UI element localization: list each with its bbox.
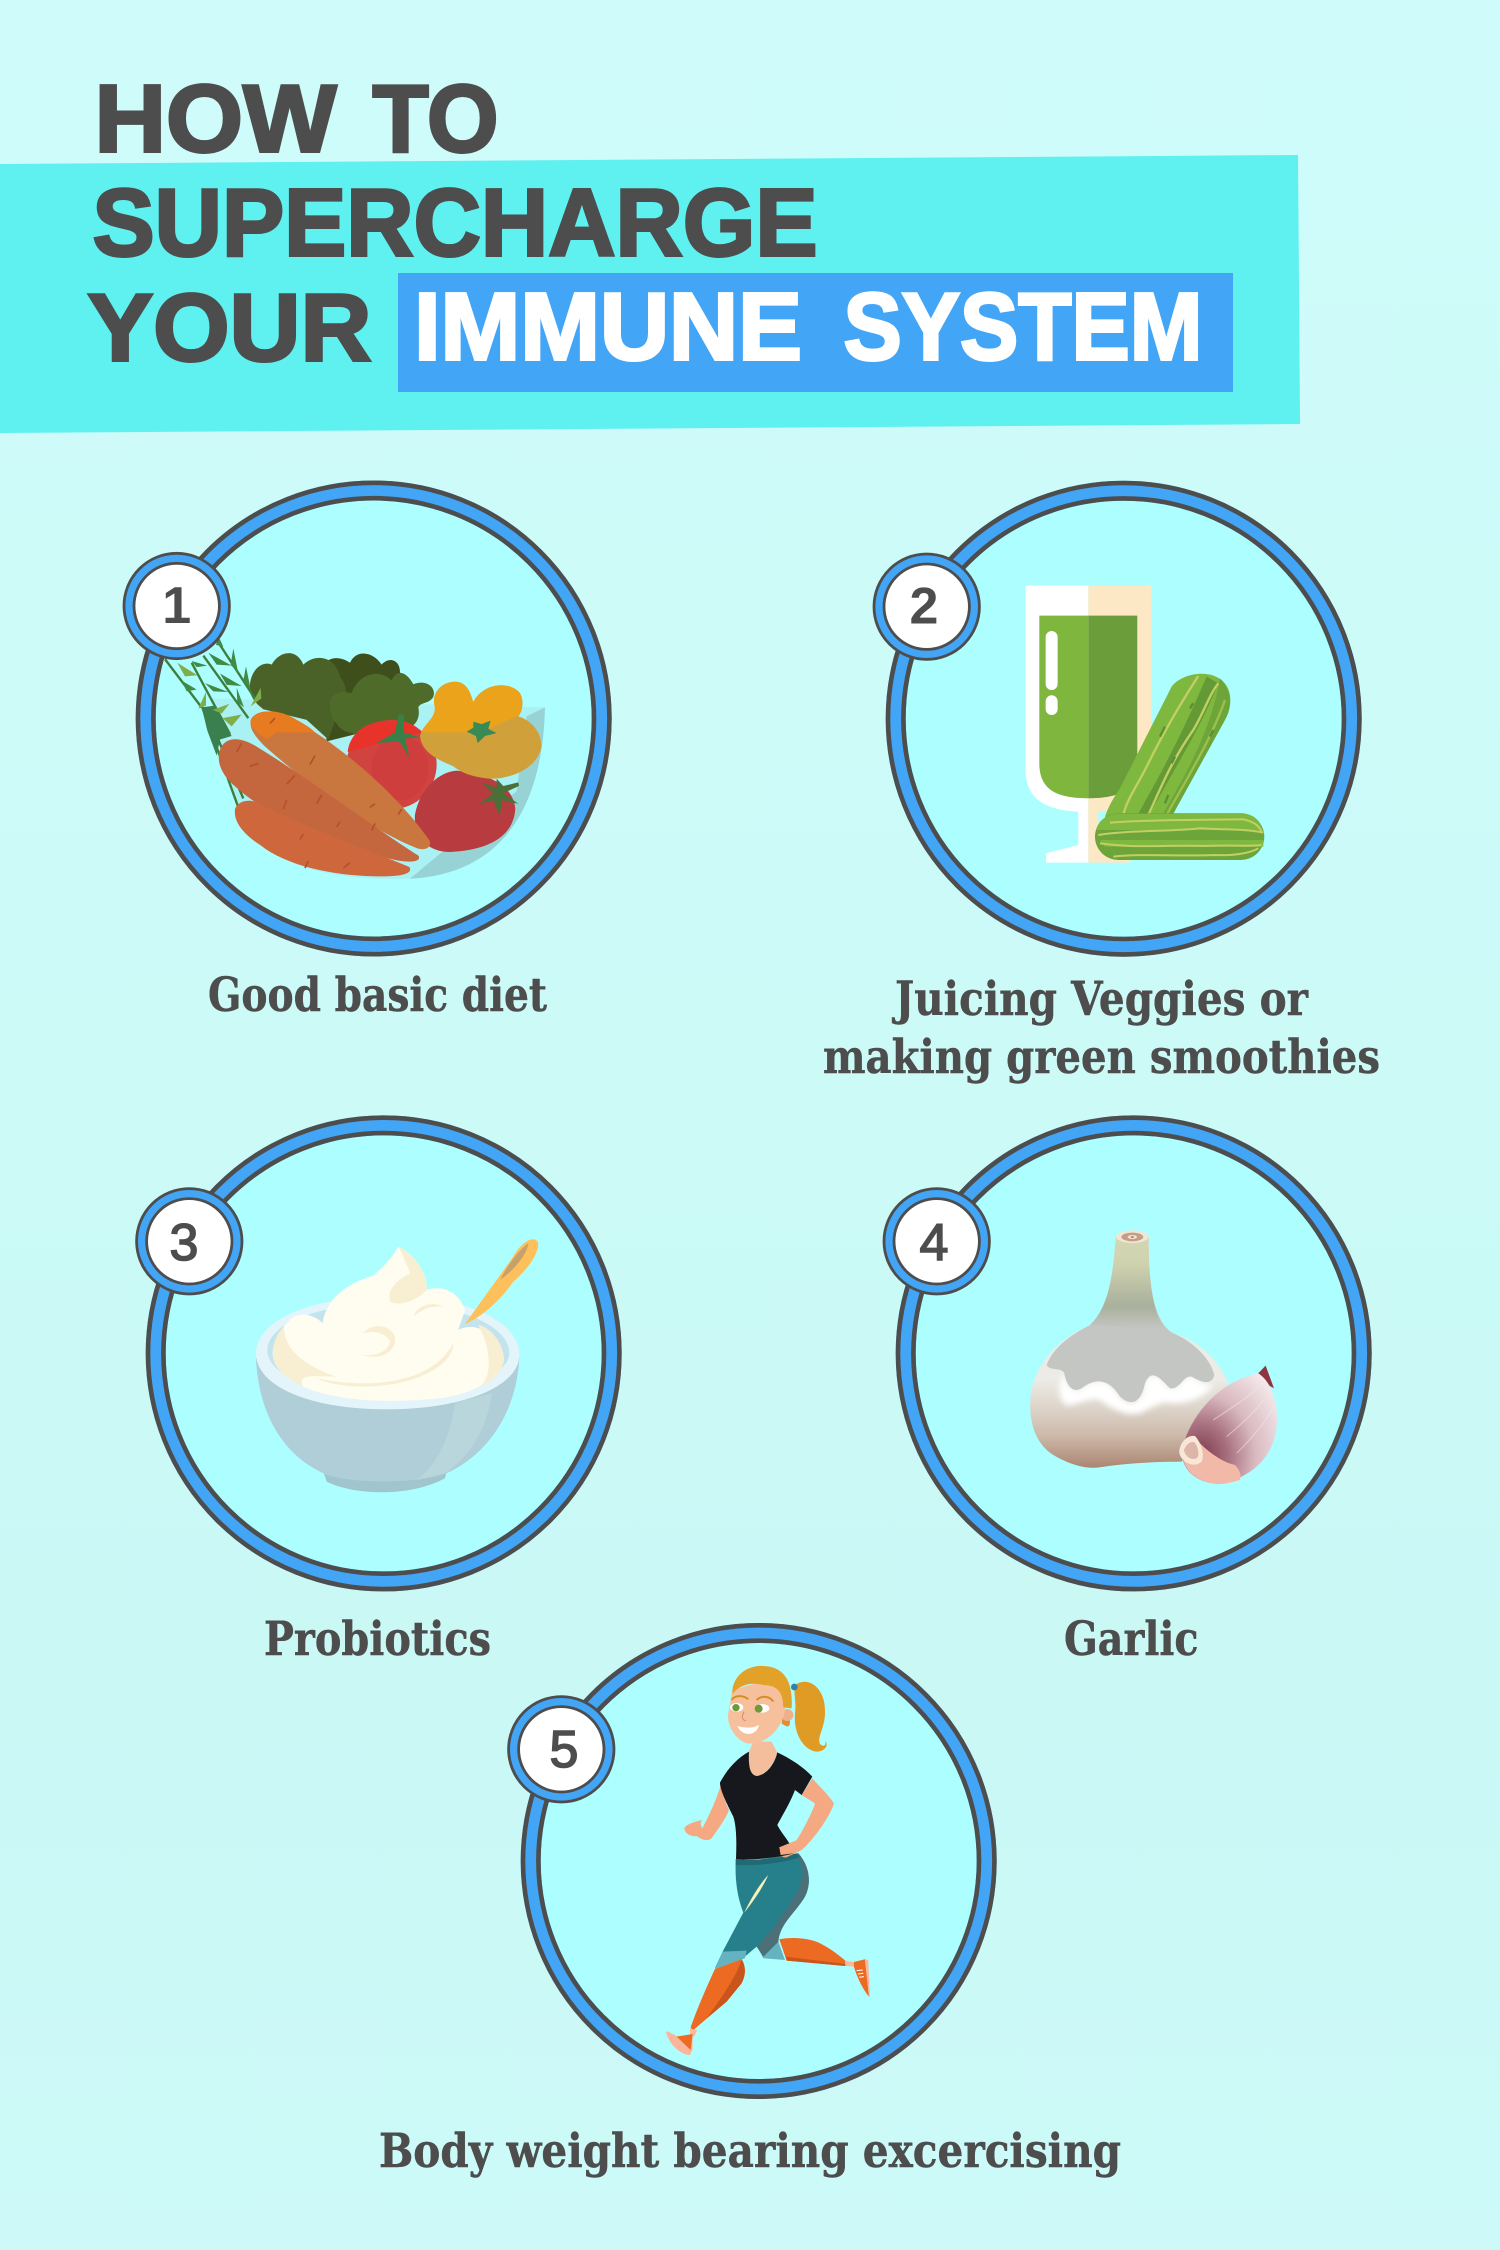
icon: running woman [666,1666,870,2055]
label: juicing veggies [823,972,1380,1085]
badge: number 1 [124,553,229,659]
label: juicing veggies: making green smoothies [823,1030,1380,1085]
badge: number 2: 2 [910,578,938,636]
icon: yogurt bowl [256,1239,538,1492]
title highlight: immune system [398,273,1233,392]
title highlight: immune system: IMMUNE [414,274,802,380]
title banner [0,155,1300,433]
badge: number 1: 1 [162,577,191,635]
title: HOW [94,66,337,172]
label: juicing veggies: Juicing Veggies or [892,972,1309,1027]
badge: number 3 [137,1189,242,1294]
badge: number 4 [884,1189,989,1294]
icon: vegetable bowl [165,636,545,879]
panel: probiotics [137,1118,619,1589]
label: good basic diet: Good basic diet [208,968,547,1023]
panel: garlic [884,1118,1369,1589]
panel: exercising [509,1625,994,2097]
title highlight: immune system: SYSTEM [844,274,1202,380]
title: YOUR [88,274,372,382]
label: probiotics: Probiotics [264,1612,491,1667]
title: TO [372,66,498,172]
title [88,66,1233,392]
panel: good basic diet [124,483,609,954]
title: SUPERCHARGE [92,170,818,276]
badge: number 5: 5 [550,1721,578,1779]
panel: juicing veggies [874,483,1359,954]
badge: number 5 [509,1697,614,1802]
icon: garlic bulb and clove [1030,1230,1277,1484]
badge: number 4: 4 [920,1214,948,1272]
badge: number 2 [874,554,979,659]
icon: green smoothie and cucumbers [1026,586,1264,863]
label: garlic: Garlic [1064,1612,1198,1667]
label: exercising: Body weight bearing excercising [379,2124,1121,2179]
badge: number 3: 3 [170,1214,198,1272]
